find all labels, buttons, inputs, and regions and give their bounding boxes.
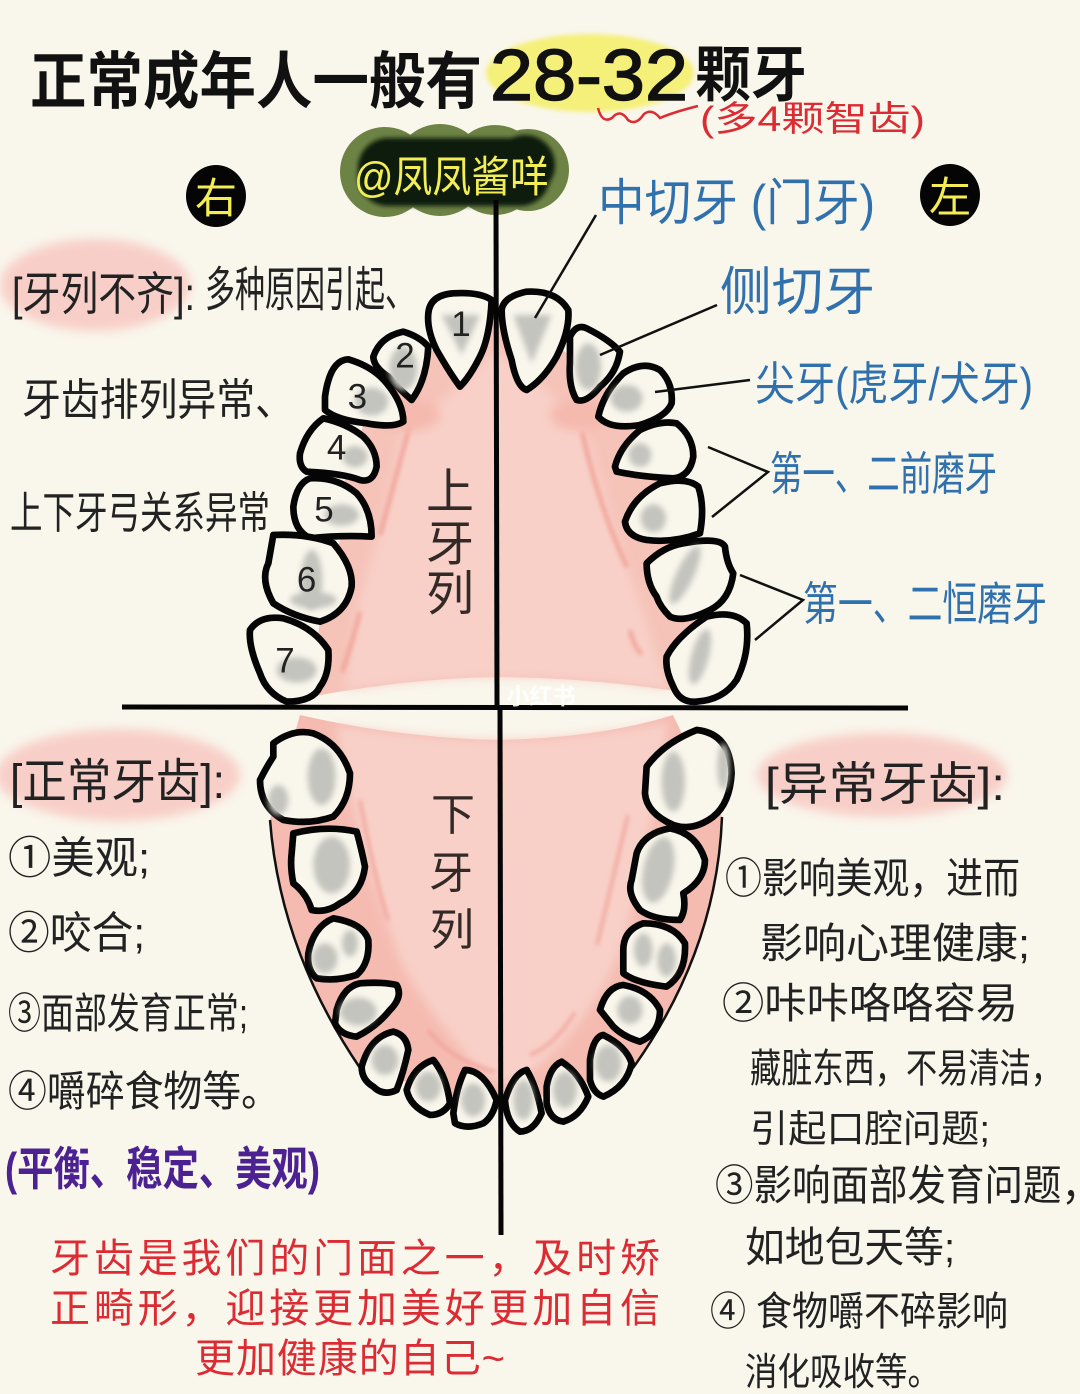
panel: misaligned teeth: [牙列不齐]: bbox=[12, 268, 195, 320]
label: premolars bbox=[708, 447, 997, 517]
panel: misaligned teeth: 牙齿排列异常、 bbox=[22, 376, 294, 425]
panel: normal teeth: [正常牙齿]: bbox=[10, 756, 225, 809]
panel: normal teeth: (平衡、稳定、美观) bbox=[5, 1143, 320, 1195]
tooth numbers: 4 bbox=[327, 428, 346, 467]
left-side marker: 左 bbox=[929, 174, 971, 221]
title: 28-32 bbox=[490, 36, 688, 116]
lower arch label: 牙 bbox=[429, 849, 473, 898]
label: lateral incisor: 侧切牙 bbox=[720, 264, 875, 322]
tooth numbers: 1 bbox=[451, 305, 471, 344]
panel: abnormal teeth: ②咔咔咯咯容易 bbox=[722, 980, 1018, 1027]
watermark badge: @凤凤酱咩 bbox=[354, 154, 549, 202]
panel: abnormal teeth: 影响心理健康; bbox=[760, 920, 1030, 967]
label: molars bbox=[740, 575, 1047, 640]
panel: misaligned teeth: 上下牙弓关系异常 bbox=[10, 489, 270, 538]
panel: abnormal teeth: ④ 食物嚼不碎影响 bbox=[710, 1290, 1008, 1334]
closing message: 正畸形，迎接更加美好更加自信 bbox=[50, 1287, 660, 1331]
lower arch label bbox=[429, 791, 475, 955]
closing message: 更加健康的自己~ bbox=[195, 1337, 505, 1381]
label: canine: 尖牙(虎牙/犬牙) bbox=[755, 358, 1033, 410]
annotation: wisdom teeth bbox=[598, 100, 925, 139]
quadrant axes bbox=[122, 200, 908, 1235]
tooth numbers: 6 bbox=[297, 561, 316, 600]
tooth numbers: 2 bbox=[395, 336, 415, 375]
closing message bbox=[50, 1237, 660, 1381]
panel: normal teeth: ②咬合; bbox=[8, 909, 145, 958]
panel: abnormal teeth: [异常牙齿]: bbox=[765, 758, 1005, 810]
left-side marker bbox=[920, 164, 980, 226]
label: lateral incisor bbox=[600, 264, 875, 355]
label: central incisor bbox=[535, 175, 875, 318]
tooth numbers: 7 bbox=[275, 642, 295, 681]
panel: abnormal teeth: 如地包天等; bbox=[745, 1224, 955, 1271]
upper arch label: 上 bbox=[426, 466, 474, 519]
upper arch label bbox=[426, 466, 474, 621]
panel: abnormal teeth: ①影响美观，进而 bbox=[725, 855, 1020, 902]
lower teeth bbox=[260, 730, 732, 1132]
tooth numbers bbox=[275, 305, 471, 681]
panel: normal teeth: ③面部发育正常; bbox=[8, 990, 248, 1037]
title bbox=[30, 34, 807, 117]
label: canine bbox=[655, 358, 1033, 410]
lower arch label: 下 bbox=[431, 791, 475, 840]
watermark badge bbox=[340, 124, 569, 217]
annotation: wisdom teeth: (多4颗智齿) bbox=[700, 100, 925, 139]
lower gums bbox=[270, 715, 722, 1110]
panel: abnormal teeth: 消化吸收等。 bbox=[745, 1352, 940, 1394]
panel: misaligned teeth: 多种原因引起、 bbox=[205, 264, 415, 317]
panel: normal teeth: ④嚼碎食物等。 bbox=[8, 1068, 280, 1115]
upper teeth bbox=[250, 292, 747, 702]
title: 颗牙 bbox=[695, 42, 807, 109]
title: 正常成年人一般有 bbox=[30, 48, 482, 117]
closing message: 牙齿是我们的门面之一，及时矫 bbox=[50, 1237, 660, 1281]
right-side marker bbox=[186, 165, 246, 227]
upper arch label: 列 bbox=[426, 568, 474, 621]
upper left teeth 1-7 bbox=[502, 292, 747, 702]
watermark: xiaohongshu: 小红书 bbox=[506, 683, 576, 709]
tooth numbers: 5 bbox=[314, 491, 334, 530]
tooth numbers: 3 bbox=[348, 377, 367, 416]
panel: abnormal teeth bbox=[710, 733, 1080, 1394]
label: central incisor: 中切牙 (门牙) bbox=[598, 175, 875, 231]
upper right teeth 1-7 bbox=[250, 293, 492, 702]
panel: misaligned teeth bbox=[0, 239, 415, 538]
upper gums bbox=[310, 310, 700, 697]
right-side marker: 右 bbox=[195, 175, 237, 222]
panel: normal teeth bbox=[0, 729, 320, 1195]
panel: abnormal teeth: 引起口腔问题; bbox=[750, 1109, 990, 1151]
lower arch label: 列 bbox=[430, 906, 474, 955]
upper arch label: 牙 bbox=[426, 518, 474, 571]
panel: normal teeth: ①美观; bbox=[8, 834, 150, 883]
